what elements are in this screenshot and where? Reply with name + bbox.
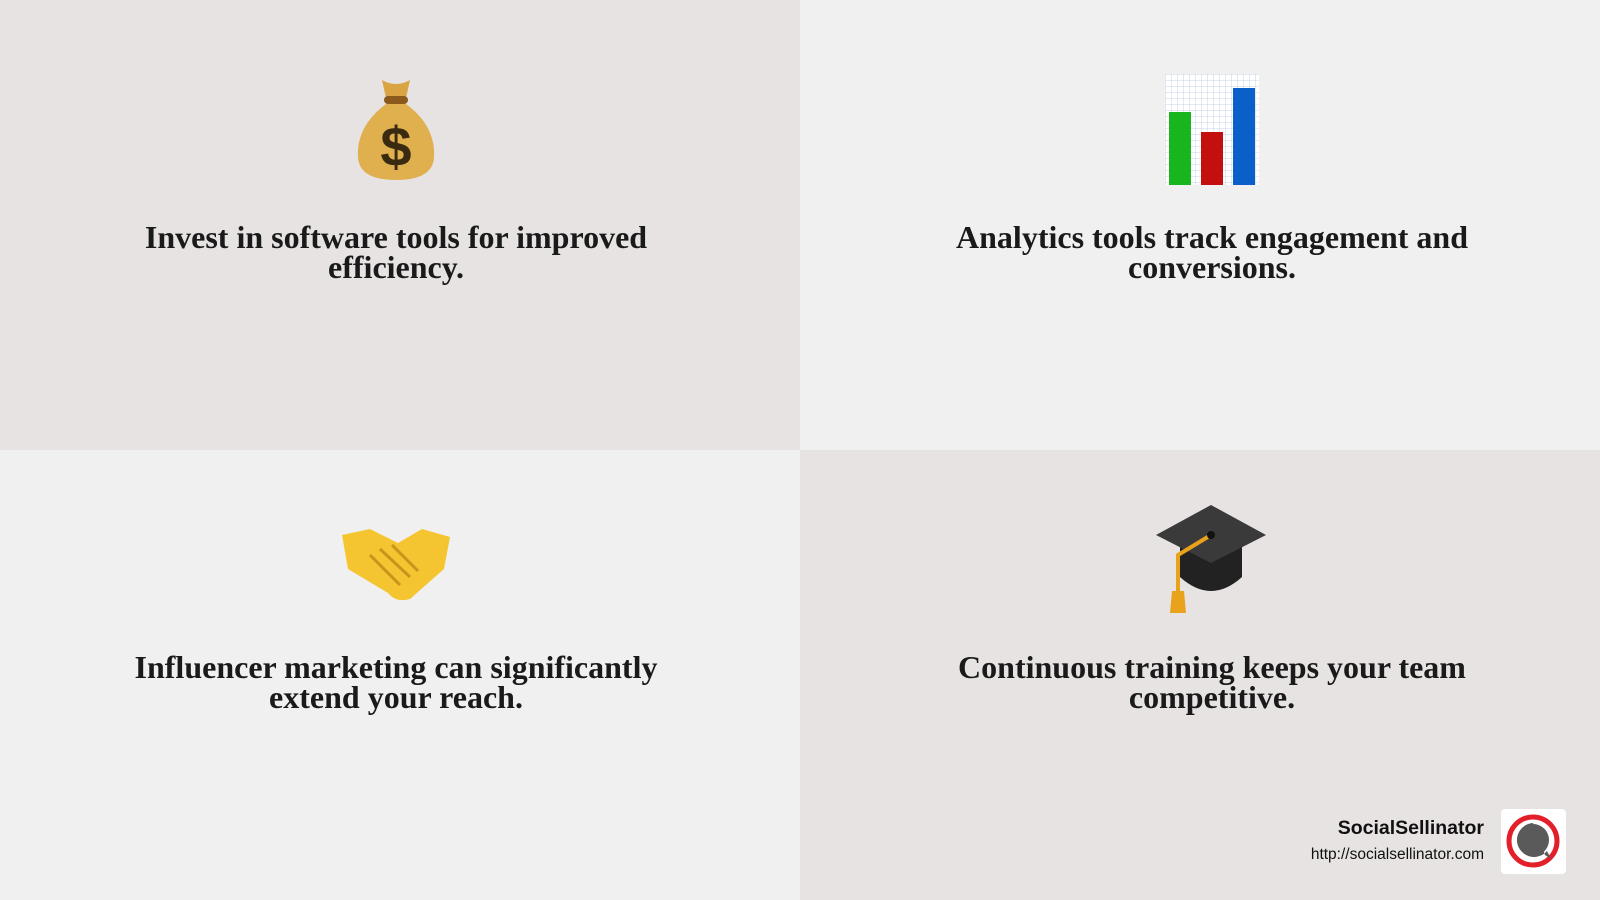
logo	[1501, 809, 1566, 874]
text: analytics: Analytics tools track engagement and	[956, 219, 1468, 255]
panel: influencer	[0, 450, 800, 900]
text: influencer: extend your reach.	[269, 679, 523, 715]
icon: money bag: $	[380, 115, 412, 178]
text: training	[958, 649, 1466, 715]
icon: handshake	[342, 529, 450, 600]
text: training: Continuous training keeps your team	[958, 649, 1466, 685]
panel: software tools	[0, 0, 800, 450]
icon: bar chart	[1165, 74, 1259, 185]
text: software tools	[145, 219, 647, 285]
brand text: SocialSellinator	[1338, 817, 1484, 839]
text: software tools: Invest in software tools for improved	[145, 219, 647, 255]
text: influencer	[135, 649, 658, 715]
text: analytics: conversions.	[1128, 249, 1296, 285]
brand text	[1311, 817, 1484, 863]
panel: analytics	[800, 0, 1600, 450]
text: influencer: Influencer marketing can significantly	[135, 649, 657, 685]
text: software tools: efficiency.	[328, 249, 464, 285]
text: analytics	[956, 219, 1468, 285]
brand text: http://socialsellinator.com	[1311, 846, 1484, 863]
panel: training	[800, 450, 1600, 900]
icon: money bag	[358, 80, 434, 180]
text: training: competitive.	[1129, 679, 1295, 715]
icon: graduation cap	[1156, 505, 1266, 613]
